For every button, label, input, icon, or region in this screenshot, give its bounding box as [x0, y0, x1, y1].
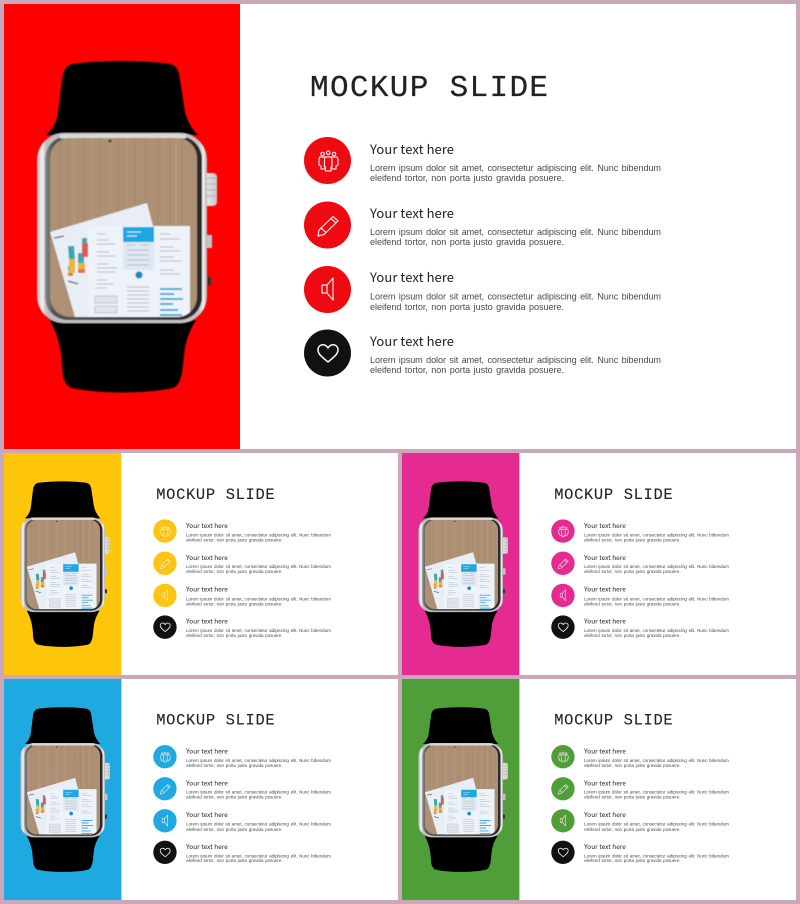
list item 2: eleifend tortor, non porta justo gravida posuere. — [584, 795, 681, 800]
list item 3: Your text here — [369, 267, 454, 286]
list item 3 — [551, 584, 729, 607]
title: MOCKUP SLIDE — [554, 712, 673, 730]
list item 4: eleifend tortor, non porta justo gravida posuere. — [186, 633, 283, 638]
icon: smartwatch mockup — [20, 481, 110, 647]
list item 2: Your text here — [583, 552, 626, 562]
list item 2: eleifend tortor, non porta justo gravida posuere. — [370, 237, 564, 247]
list item 4 — [153, 841, 331, 864]
title: MOCKUP SLIDE — [554, 486, 673, 504]
list item 2: Your text here — [369, 203, 454, 222]
list item 4: Your text here — [369, 331, 454, 350]
list item 1: eleifend tortor, non porta justo gravida posuere. — [370, 173, 564, 183]
list item 3: eleifend tortor, non porta justo gravida posuere. — [370, 302, 564, 312]
list item 3: Lorem ipsum dolor sit amet, consectetur adipiscing elit. Nunc bibendum — [584, 822, 729, 827]
list item 4: eleifend tortor, non porta justo gravida posuere. — [584, 858, 681, 863]
list item 4: Your text here — [185, 842, 228, 851]
list item 2 — [551, 552, 729, 575]
list item 1: Lorem ipsum dolor sit amet, consectetur adipiscing elit. Nunc bibendum — [186, 532, 331, 537]
panel: magenta slide — [402, 453, 796, 675]
title: MOCKUP SLIDE — [156, 712, 275, 730]
icon: smartwatch mockup — [418, 481, 508, 647]
list item 4 — [551, 841, 729, 864]
list item 3: Your text here — [583, 810, 626, 819]
list item 3: eleifend tortor, non porta justo gravida posuere. — [584, 602, 681, 607]
list item 3: eleifend tortor, non porta justo gravida posuere. — [186, 827, 283, 832]
list item 1: eleifend tortor, non porta justo gravida posuere. — [186, 537, 283, 542]
list item 4: eleifend tortor, non porta justo gravida posuere. — [370, 365, 564, 375]
list item 4: Lorem ipsum dolor sit amet, consectetur adipiscing elit. Nunc bibendum — [584, 853, 729, 858]
list item 2: Your text here — [583, 778, 626, 787]
list item 4 — [153, 615, 331, 639]
list item 1: eleifend tortor, non porta justo gravida posuere. — [186, 763, 283, 768]
icon: smartwatch mockup — [20, 707, 110, 872]
list item 2: Your text here — [185, 778, 228, 787]
list item 1: Lorem ipsum dolor sit amet, consectetur adipiscing elit. Nunc bibendum — [584, 532, 729, 537]
list item 3: Your text here — [583, 584, 626, 594]
panel: magenta side band — [402, 453, 519, 675]
list item 2: Lorem ipsum dolor sit amet, consectetur adipiscing elit. Nunc bibendum — [186, 790, 331, 795]
list item 3 — [153, 809, 331, 832]
list item 2 — [153, 777, 331, 800]
list item 4: Lorem ipsum dolor sit amet, consectetur adipiscing elit. Nunc bibendum — [370, 355, 661, 365]
list item 3 — [304, 266, 661, 313]
list item 1 — [304, 137, 661, 184]
title: MOCKUP SLIDE — [156, 486, 275, 504]
list item 4: Lorem ipsum dolor sit amet, consectetur adipiscing elit. Nunc bibendum — [186, 853, 331, 858]
list item 4: Lorem ipsum dolor sit amet, consectetur adipiscing elit. Nunc bibendum — [186, 628, 331, 633]
list item 3: eleifend tortor, non porta justo gravida posuere. — [584, 827, 681, 832]
list item 2: eleifend tortor, non porta justo gravida posuere. — [186, 795, 283, 800]
list item 1: Your text here — [185, 746, 228, 755]
list item 4 — [304, 330, 661, 376]
panel: green side band — [402, 679, 519, 900]
list item 1: Your text here — [185, 520, 228, 530]
list item 3: Your text here — [185, 810, 228, 819]
list item 3: Lorem ipsum dolor sit amet, consectetur adipiscing elit. Nunc bibendum — [186, 822, 331, 827]
list item 1 — [551, 745, 729, 768]
panel: blue slide — [4, 679, 398, 900]
list item 2: Lorem ipsum dolor sit amet, consectetur adipiscing elit. Nunc bibendum — [370, 227, 661, 237]
list item 3: Your text here — [185, 584, 228, 594]
list item 4: Your text here — [583, 842, 626, 851]
list item 1 — [551, 519, 729, 543]
list item 3: eleifend tortor, non porta justo gravida posuere. — [186, 602, 283, 607]
panel: green slide — [402, 679, 796, 900]
list item 1: eleifend tortor, non porta justo gravida posuere. — [584, 763, 681, 768]
panel: large red slide — [4, 4, 796, 449]
list item 2: Lorem ipsum dolor sit amet, consectetur adipiscing elit. Nunc bibendum — [584, 564, 729, 569]
panel: yellow slide — [4, 453, 398, 675]
list item 2 — [304, 202, 661, 248]
list item 2: Lorem ipsum dolor sit amet, consectetur adipiscing elit. Nunc bibendum — [186, 564, 331, 569]
list item 2 — [551, 777, 729, 800]
list item 3 — [153, 584, 331, 607]
list item 4: Lorem ipsum dolor sit amet, consectetur adipiscing elit. Nunc bibendum — [584, 628, 729, 633]
list item 1 — [153, 519, 331, 543]
list item 1: Lorem ipsum dolor sit amet, consectetur adipiscing elit. Nunc bibendum — [370, 163, 661, 173]
list item 1: Lorem ipsum dolor sit amet, consectetur adipiscing elit. Nunc bibendum — [186, 758, 331, 763]
list item 3: Lorem ipsum dolor sit amet, consectetur adipiscing elit. Nunc bibendum — [186, 596, 331, 601]
list item 1: Lorem ipsum dolor sit amet, consectetur adipiscing elit. Nunc bibendum — [584, 758, 729, 763]
list item 2 — [153, 552, 331, 575]
list item 1: Your text here — [583, 520, 626, 530]
panel: blue side band — [4, 679, 121, 900]
list item 2: eleifend tortor, non porta justo gravida posuere. — [186, 569, 283, 574]
list item 2: Lorem ipsum dolor sit amet, consectetur adipiscing elit. Nunc bibendum — [584, 790, 729, 795]
panel: red side band — [4, 4, 240, 449]
list item 2: eleifend tortor, non porta justo gravida posuere. — [584, 569, 681, 574]
list item 4: eleifend tortor, non porta justo gravida posuere. — [584, 633, 681, 638]
list item 4: eleifend tortor, non porta justo gravida posuere. — [186, 858, 283, 863]
icon: smartwatch mockup — [37, 61, 217, 392]
list item 1 — [153, 745, 331, 768]
panel: yellow side band — [4, 453, 121, 675]
list item 1: eleifend tortor, non porta justo gravida posuere. — [584, 537, 681, 542]
list item 2: Your text here — [185, 552, 228, 562]
title: MOCKUP SLIDE — [310, 71, 548, 106]
list item 1: Your text here — [583, 746, 626, 755]
list item 1: Your text here — [369, 139, 454, 158]
list item 3: Lorem ipsum dolor sit amet, consectetur adipiscing elit. Nunc bibendum — [584, 596, 729, 601]
icon: smartwatch mockup — [418, 707, 508, 872]
list item 4: Your text here — [583, 616, 626, 626]
list item 3: Lorem ipsum dolor sit amet, consectetur adipiscing elit. Nunc bibendum — [370, 292, 661, 302]
list item 4: Your text here — [185, 616, 228, 626]
list item 4 — [551, 615, 729, 639]
list item 3 — [551, 809, 729, 832]
